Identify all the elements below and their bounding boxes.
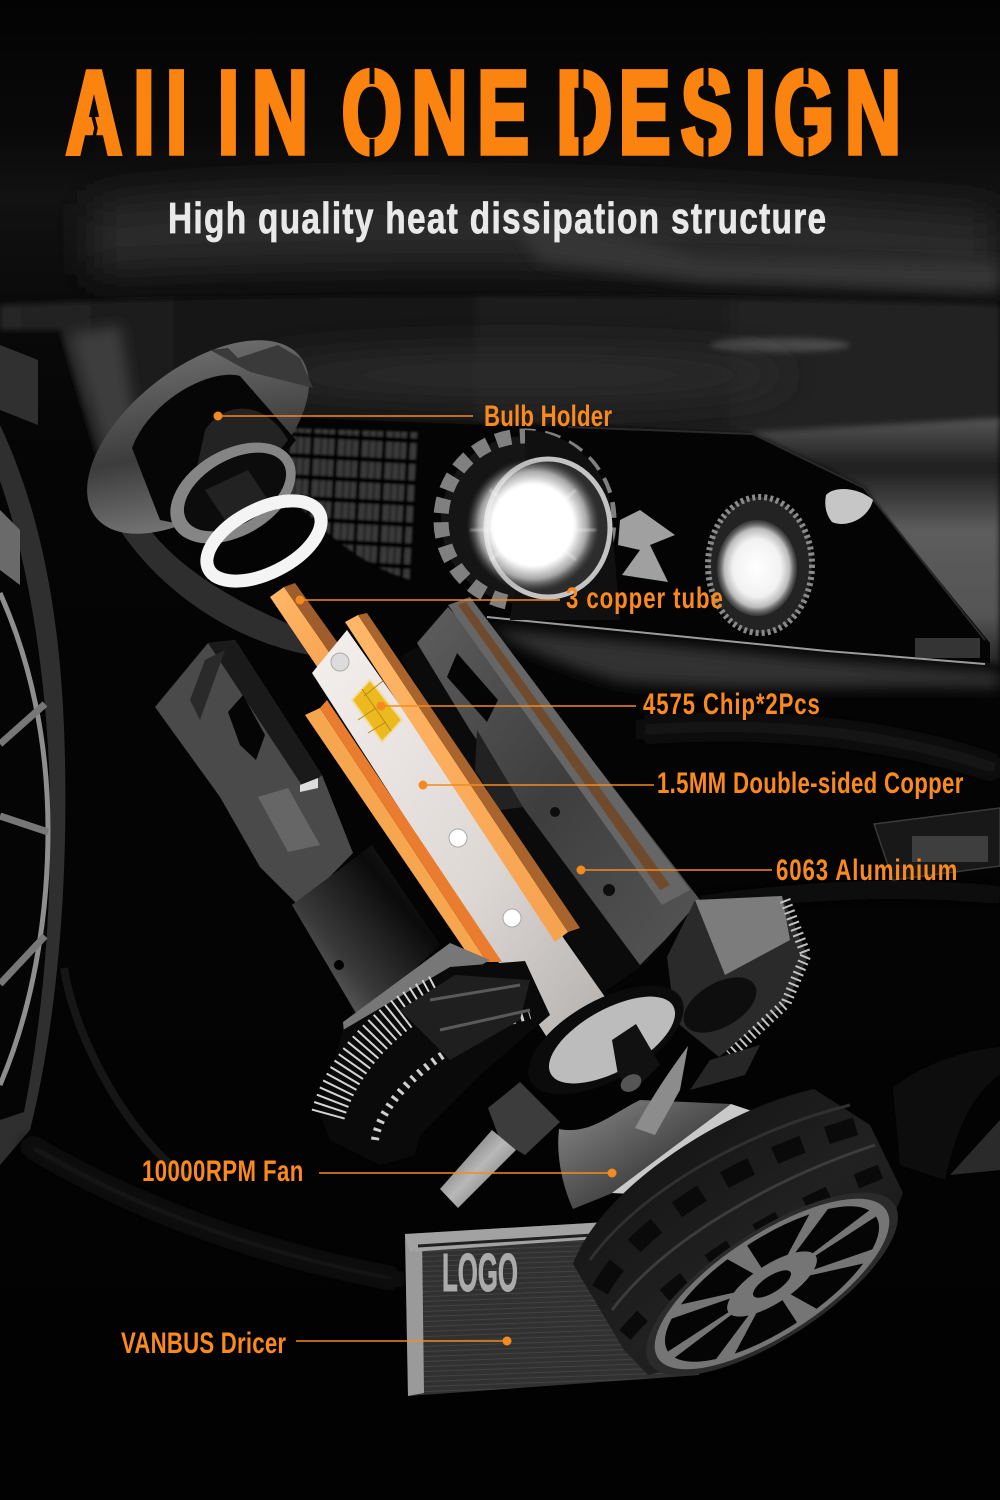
exploded product: left fan fins <box>320 943 550 1165</box>
door handle and lower body lines <box>25 808 1000 1280</box>
callout: 1.5MM Double-sided Copper: 1.5MM Double-sided Copper <box>657 766 963 800</box>
exploded product: left heatsink bracket <box>155 640 353 907</box>
exploded product: right aluminium frame <box>400 597 700 995</box>
exploded product: bulb holder <box>53 303 343 571</box>
exploded product: copper board with chip <box>305 613 605 1042</box>
headlight lower swoosh <box>120 530 330 655</box>
callout: 1.5MM Double-sided Copper <box>418 766 963 800</box>
callout: 10000RPM Fan <box>142 1154 616 1188</box>
holder front ring <box>153 422 313 564</box>
fan grille <box>620 1159 924 1409</box>
callout: 6063 Aluminium <box>576 853 957 887</box>
title: AII IN ONE DESIGN <box>66 47 901 179</box>
exploded product: white ring <box>194 484 334 598</box>
headlight housing <box>150 412 990 664</box>
side emblem highlight <box>618 510 675 582</box>
main lamp <box>486 459 610 597</box>
main lamp toothed ring <box>417 412 633 628</box>
LED chip <box>352 680 402 742</box>
exploded product: fan blade <box>558 1045 760 1209</box>
callout: 6063 Aluminium: 6063 Aluminium <box>776 853 957 887</box>
headlight mesh grille <box>285 428 418 580</box>
callout: 3 copper tube: 3 copper tube <box>566 581 723 615</box>
callout: 10000RPM Fan: 10000RPM Fan <box>142 1154 303 1188</box>
callout: Bulb Holder <box>214 399 612 433</box>
callout: Bulb Holder: Bulb Holder <box>484 399 612 433</box>
reflection patch <box>825 489 873 524</box>
exploded product: VANBUS driver: LOGO <box>442 1243 518 1303</box>
callout: 4575 Chip <box>376 687 820 721</box>
exploded product: black cylinder <box>292 845 440 1020</box>
exploded product: round fan <box>573 1089 924 1409</box>
exploded product: VANBUS driver <box>405 1220 699 1396</box>
exploded product: copper tube <box>270 583 350 680</box>
callout: 3 copper tube <box>296 581 723 615</box>
callout: VANBUS Dricer <box>121 1326 512 1360</box>
front wheel <box>0 425 65 1165</box>
exploded product: collar and stem <box>440 963 701 1208</box>
callout: 4575 Chip: 4575 Chip*2Pcs <box>643 687 820 721</box>
exploded product: right fan fins <box>667 896 808 1057</box>
subtitle: High quality heat dissipation structure <box>168 195 826 243</box>
secondary lamp <box>708 497 812 633</box>
callout: VANBUS Dricer: VANBUS Dricer <box>121 1326 286 1360</box>
